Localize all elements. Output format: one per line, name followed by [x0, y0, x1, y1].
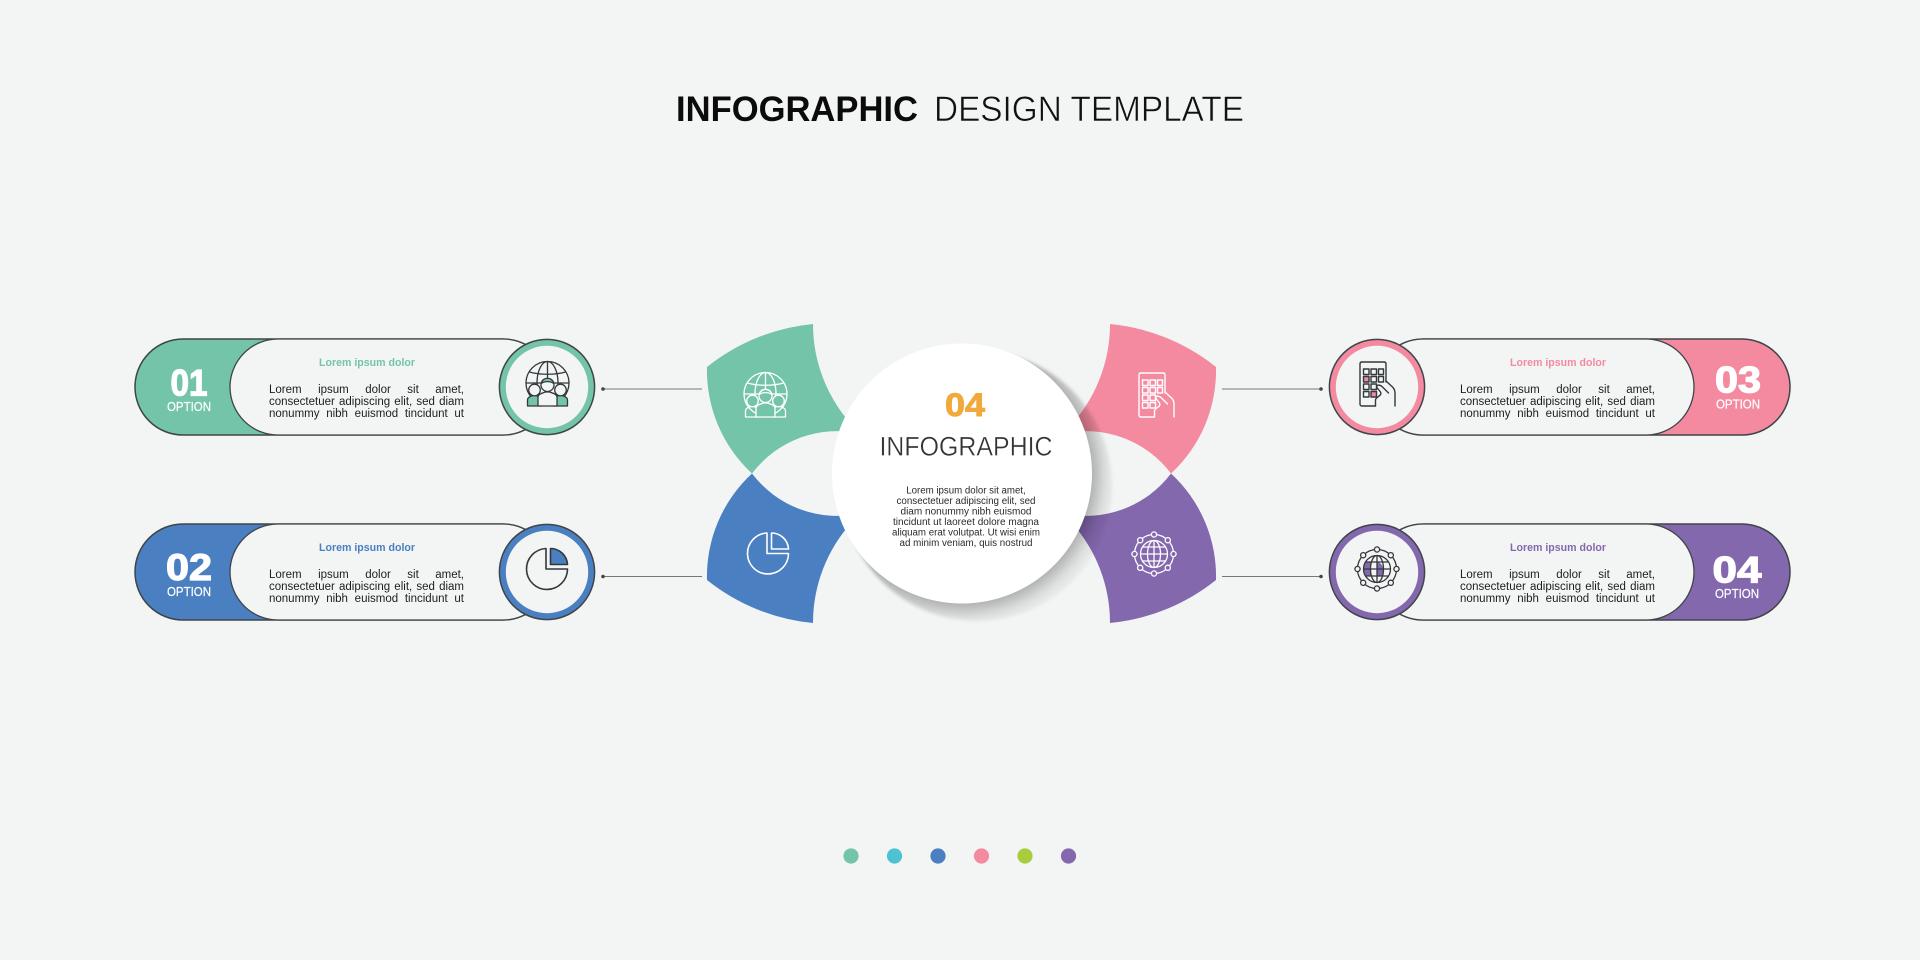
- icon: pie chart on blue petal: [748, 533, 788, 574]
- icon: network globe on purple petal: [1132, 532, 1176, 576]
- option 03 heading: Lorem ipsum dolor: [1510, 357, 1607, 369]
- centre body text: aliquam erat volutpat. Ut wisi enim: [892, 527, 1040, 538]
- icon: pie chart: [526, 548, 568, 589]
- option 04 number: 04: [1712, 550, 1762, 590]
- panel: option 01 card: [135, 339, 595, 435]
- option 02 icon ring: [499, 524, 595, 620]
- centre body text: Lorem ipsum dolor sit amet,: [906, 485, 1026, 496]
- option 01 text: Lorem ipsum dolor sit amet,: [269, 384, 464, 396]
- petal: pink: [1063, 324, 1216, 474]
- panel: centre circle: [832, 344, 1092, 604]
- title: INFOGRAPHIC: [676, 90, 918, 129]
- option 02 label: OPTION: [167, 585, 211, 599]
- centre circle shadow: [842, 351, 1112, 621]
- icon: network globe: [1355, 547, 1399, 591]
- option 01 coloured pill: [135, 339, 551, 435]
- panel: option 04 card: [1329, 524, 1790, 620]
- option 03 text: nonummy nibh euismod tincidunt ut: [1460, 408, 1655, 420]
- option 01 icon ring: [499, 339, 595, 435]
- option 04 text: [1460, 569, 1655, 606]
- icon: globe with people on green petal: [744, 372, 787, 417]
- option 01 text: consectetuer adipiscing elit, sed diam: [269, 396, 464, 408]
- option 03 text: [1460, 384, 1655, 421]
- option 02 text: Lorem ipsum dolor sit amet,: [269, 569, 464, 581]
- option 03 coloured pill: [1375, 339, 1790, 435]
- centre body text: consectetuer adipiscing elit, sed: [896, 496, 1036, 507]
- connector: option 03: [1222, 387, 1323, 391]
- option 01 text: [269, 384, 464, 421]
- centre body text: [892, 485, 1040, 549]
- connector: option 01: [601, 387, 702, 391]
- connector: option 04: [1222, 575, 1323, 578]
- panel: option 02 card: [135, 524, 595, 620]
- option 04 label: OPTION: [1715, 587, 1759, 601]
- panel: option 03 card: [1329, 339, 1790, 435]
- option 04 heading: Lorem ipsum dolor: [1510, 542, 1607, 554]
- centre heading: INFOGRAPHIC: [880, 432, 1052, 462]
- option 02 text: consectetuer adipiscing elit, sed diam: [269, 581, 464, 593]
- option 01 label: OPTION: [167, 400, 211, 414]
- centre body text: ad minim veniam, quis nostrud: [900, 538, 1032, 549]
- centre number: 04: [945, 387, 985, 423]
- title: DESIGN TEMPLATE: [934, 90, 1244, 129]
- option 02 text: nonummy nibh euismod tincidunt ut: [269, 593, 464, 605]
- option 04 text: Lorem ipsum dolor sit amet,: [1460, 569, 1655, 581]
- petal: blue: [707, 474, 860, 623]
- option 01 text: nonummy nibh euismod tincidunt ut: [269, 408, 464, 420]
- option 02 text: [269, 569, 464, 606]
- option 04 icon ring: [1329, 524, 1425, 620]
- option 02 heading: Lorem ipsum dolor: [319, 542, 416, 554]
- icon: phone keypad in hand: [1360, 362, 1395, 406]
- option 04 text: consectetuer adipiscing elit, sed diam: [1460, 581, 1655, 593]
- option 01 inner pill: [230, 339, 551, 435]
- title: [676, 90, 1244, 129]
- option 01 heading: Lorem ipsum dolor: [319, 357, 416, 369]
- petal: green: [707, 324, 860, 474]
- option 04 coloured pill: [1375, 524, 1790, 620]
- petal: purple: [1063, 474, 1216, 623]
- centre body text: diam nonummy nibh euismod: [900, 506, 1032, 517]
- option 03 number: 03: [1715, 360, 1761, 400]
- icon: globe with people: [526, 362, 569, 406]
- option 03 text: Lorem ipsum dolor sit amet,: [1460, 384, 1655, 396]
- connector: option 02: [601, 575, 702, 578]
- option 03 inner pill: [1375, 339, 1694, 435]
- option 02 inner pill: [230, 524, 551, 620]
- option 02 number: 02: [166, 547, 212, 588]
- option 03 icon ring: [1329, 339, 1425, 435]
- option 04 inner pill: [1375, 524, 1694, 620]
- option 02 coloured pill: [135, 524, 551, 620]
- option 01 number: 01: [170, 362, 208, 404]
- option 03 text: consectetuer adipiscing elit, sed diam: [1460, 396, 1655, 408]
- option 03 label: OPTION: [1716, 398, 1760, 412]
- palette dots: [843, 848, 1076, 864]
- option 04 text: nonummy nibh euismod tincidunt ut: [1460, 593, 1655, 605]
- centre body text: tincidunt ut laoreet dolore magna: [893, 517, 1039, 528]
- icon: phone on pink petal: [1139, 373, 1174, 417]
